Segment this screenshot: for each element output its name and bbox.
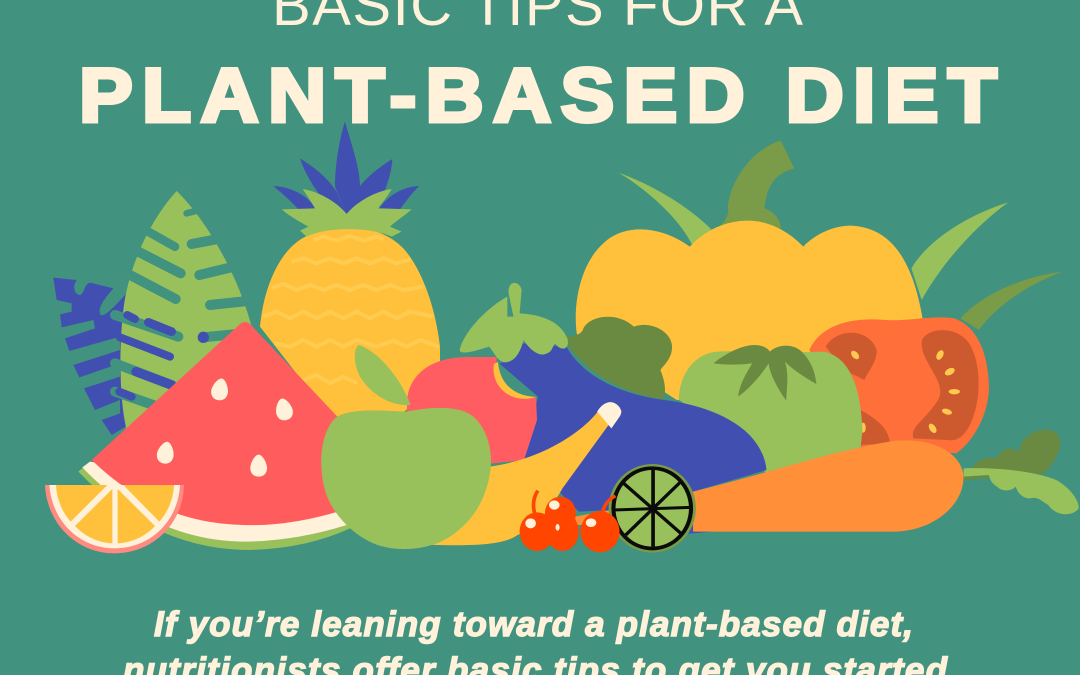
illustration: green apple [321,345,491,549]
illustration: green tomato [679,345,862,473]
illustration: pineapple [260,122,440,417]
illustration: bell pepper [576,141,1062,400]
illustration: eggplant [460,283,767,534]
illustration: green tropical leaf [115,191,257,430]
intro text [123,605,958,675]
illustration: orange slice [45,485,184,553]
illustration: broccoli [567,317,672,399]
title: main heading: PLANT-BASED DIET [79,53,997,138]
illustration: halved tomato [809,317,989,453]
illustration: bitten red apple [407,357,537,470]
illustration: cherries [520,491,620,552]
illustration: blue tropical leaf [53,278,137,435]
illustration: lime slice [609,464,696,553]
illustration: banana [391,402,622,545]
intro text: If you’re leaning toward a plant-based diet, [154,605,913,644]
illustration: carrot [575,430,1079,532]
illustration: watermelon slice [78,322,350,550]
